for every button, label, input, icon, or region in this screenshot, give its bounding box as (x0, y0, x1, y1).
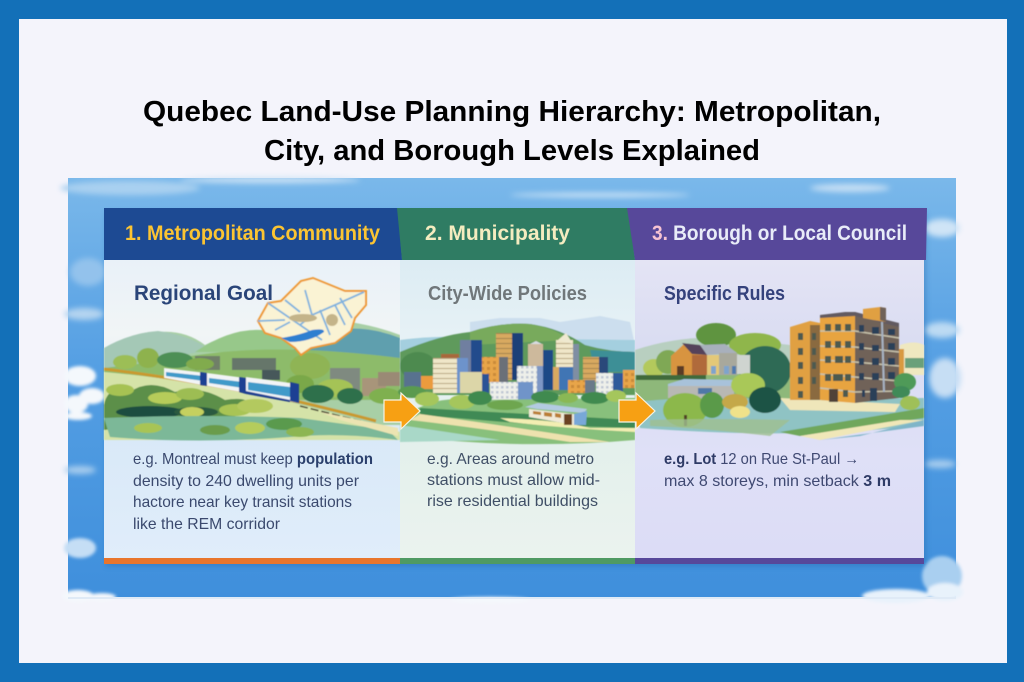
town blocks (195, 356, 220, 370)
panel body 3 (635, 260, 924, 558)
panel: borough or local council (627, 208, 927, 564)
subheading: city-wide policies: City-Wide Policies (428, 283, 587, 305)
accent bar purple (635, 558, 924, 564)
subheading: specific rules: Specific Rules (664, 283, 785, 305)
text block: metropolitan example: like the REM corridor (133, 516, 281, 533)
panel 3 header: 3. Borough or Local Council (652, 221, 907, 245)
subheading: regional goal: Regional Goal (134, 282, 273, 305)
text block: municipality example: e.g. Areas around metro (427, 451, 594, 468)
illustration: regional landscape and train (104, 319, 401, 440)
apartment block (790, 321, 820, 400)
school building (525, 403, 587, 413)
panel shadow (106, 212, 926, 566)
panel body 1 (104, 260, 400, 558)
text block: metropolitan example: density to 240 dwelling units per (133, 473, 360, 490)
text block: metropolitan example: hactore near key transit stations (133, 494, 352, 511)
text block: borough example (664, 451, 891, 490)
text block: borough example: e.g. Lot 12 on Rue St-Paul → (664, 451, 859, 468)
accent bar orange (104, 558, 400, 564)
text block: municipality example: stations must allow mid- (427, 472, 600, 489)
arrow: metropolitan to municipality (384, 393, 420, 429)
accent bar green (400, 558, 635, 564)
illustration: city skyline (398, 316, 635, 444)
title: City, and Borough Levels Explained (264, 135, 760, 167)
title (143, 96, 881, 167)
rail line (104, 369, 376, 421)
shrubs and lawn (400, 398, 635, 444)
text block: municipality example: rise residential buildings (427, 493, 598, 510)
text block: metropolitan example (133, 451, 373, 533)
tree backdrop (696, 323, 736, 347)
foreground trees (663, 393, 707, 427)
title: Quebec Land-Use Planning Hierarchy: Metropolitan, (143, 96, 881, 128)
low house (668, 379, 740, 386)
panel 1 header (104, 208, 402, 260)
panel: metropolitan community (104, 208, 402, 564)
arrow: municipality to borough (619, 393, 655, 429)
sky background illustration (60, 177, 963, 603)
tree clusters (113, 355, 137, 369)
skyscrapers (460, 340, 471, 372)
panel 3 header (627, 208, 927, 260)
illustration: houses and apartment block (635, 307, 924, 440)
panel 2 header (397, 208, 635, 260)
foreground bushes (104, 385, 251, 430)
icon: regional map (258, 278, 366, 355)
icon: train (164, 368, 299, 403)
text block: metropolitan example: e.g. Montreal must keep population (133, 451, 373, 468)
panel 2 header: 2. Municipality (425, 221, 570, 245)
panel: municipality (397, 208, 635, 564)
panel 1 header: 1. Metropolitan Community (125, 221, 380, 245)
text block: municipality example (427, 451, 600, 510)
text block: borough example: max 8 storeys, min setback 3 m (664, 473, 891, 490)
panel body 2 (400, 260, 635, 558)
houses (671, 344, 707, 375)
